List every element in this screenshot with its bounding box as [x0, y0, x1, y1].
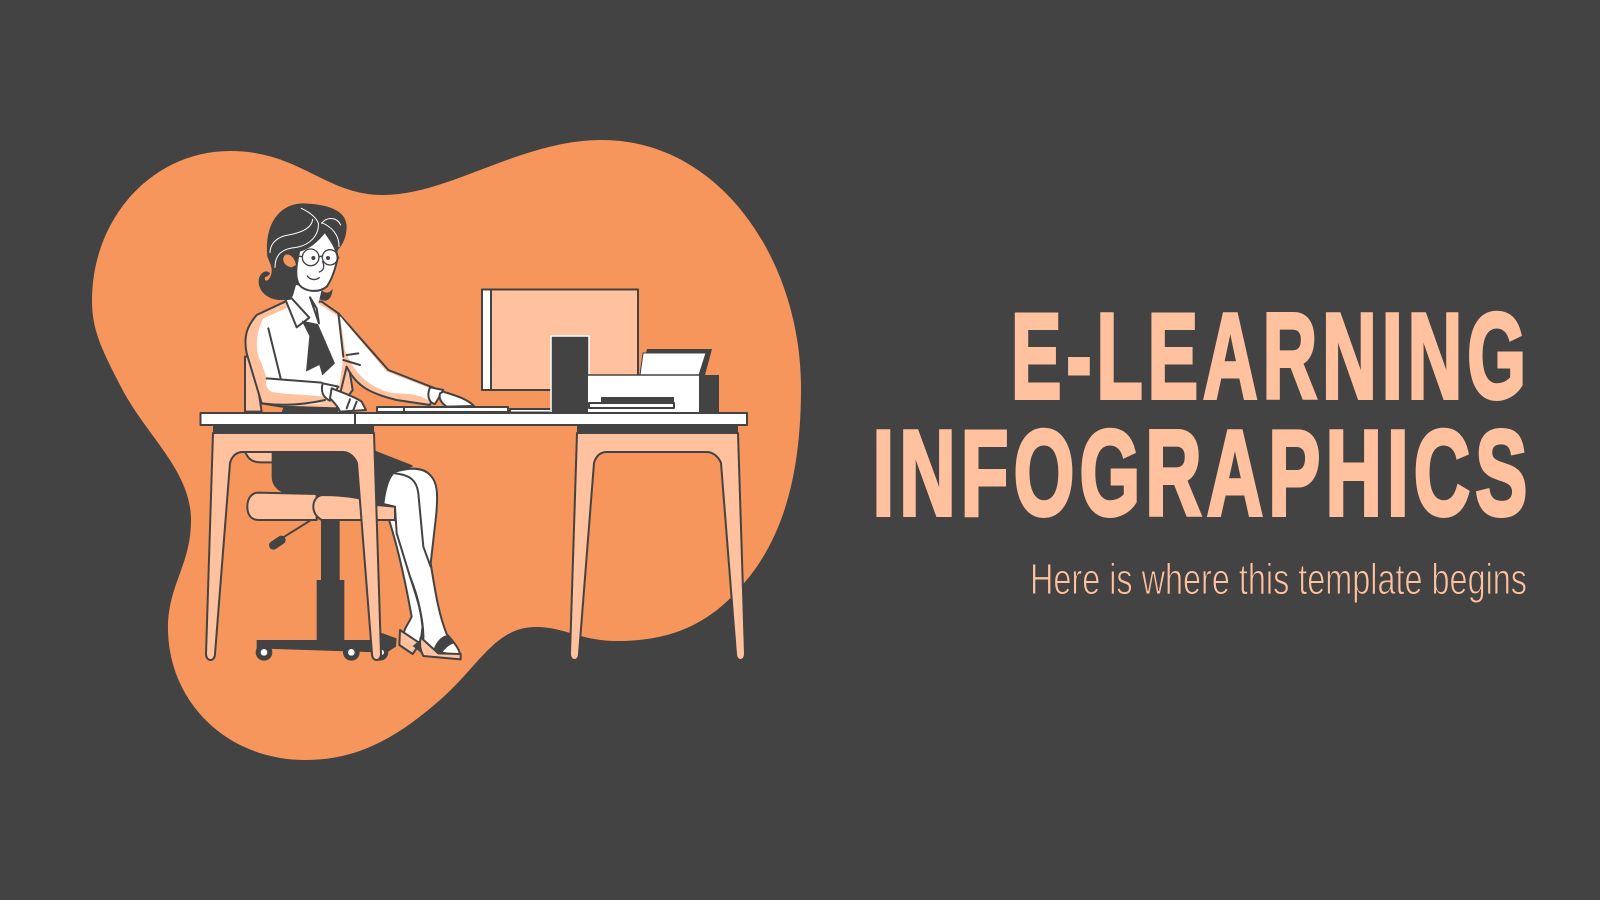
hair back [259, 203, 347, 300]
torso and head [245, 203, 474, 413]
neck [292, 285, 322, 318]
shirt body [245, 302, 435, 408]
seat cushion [247, 493, 395, 520]
printer [588, 349, 719, 413]
waist [282, 405, 337, 413]
chair back [245, 357, 262, 412]
necktie [302, 321, 335, 375]
desk left leg [206, 433, 381, 660]
title [872, 288, 1532, 541]
front leg [383, 469, 460, 655]
glasses and eyes [297, 249, 339, 280]
collar [285, 297, 319, 327]
desk top [200, 413, 747, 425]
shirt highlights [257, 303, 343, 405]
shirt side lines [268, 313, 360, 378]
right hair curl [316, 288, 333, 301]
ear [283, 254, 296, 267]
lower body and chair [245, 452, 461, 661]
orange blob [92, 140, 801, 760]
knee crease [395, 473, 431, 637]
right hand [428, 387, 474, 407]
desk right leg [570, 433, 745, 660]
chair column and base [256, 520, 397, 661]
left arm [266, 379, 322, 397]
chair back lower [245, 452, 277, 462]
hair strands [270, 208, 341, 267]
illustration: woman at desk [200, 203, 747, 661]
monitor [482, 290, 638, 413]
shoes [399, 630, 461, 659]
back leg [383, 503, 430, 647]
chair lever [273, 521, 310, 545]
desk apron bands [213, 425, 738, 433]
keyboard [377, 407, 508, 412]
skirt [273, 452, 412, 505]
face [296, 232, 338, 291]
left hand [322, 383, 366, 412]
